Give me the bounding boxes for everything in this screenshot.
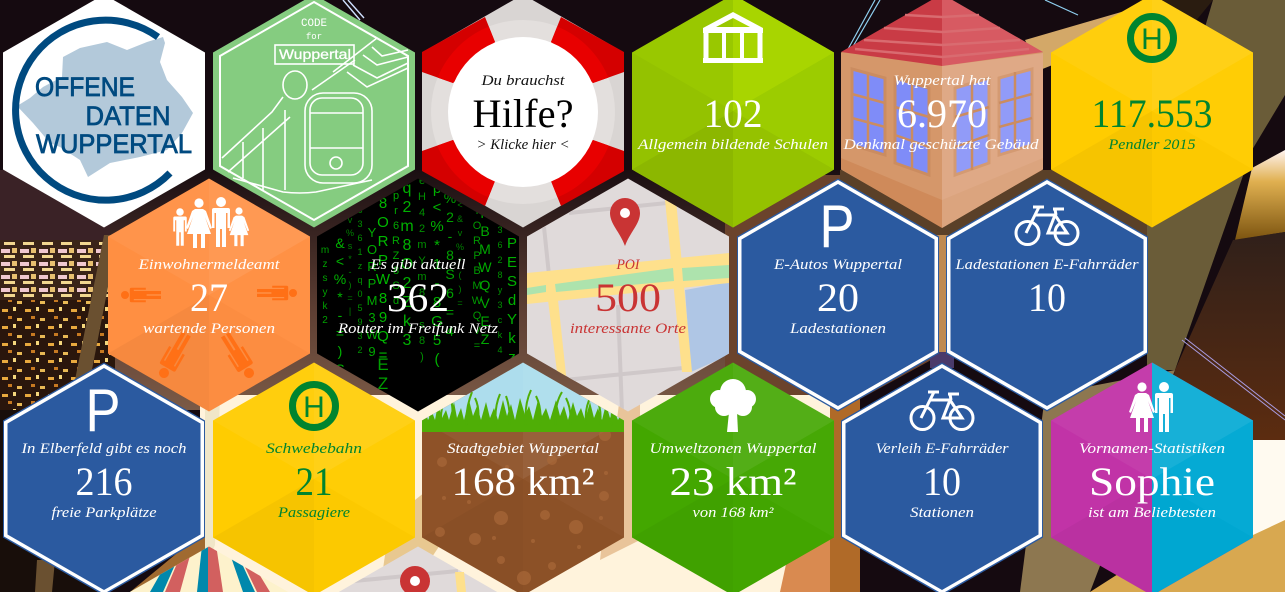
- map road: [455, 572, 466, 592]
- text: 500: 500: [595, 275, 661, 320]
- hexagon: e-bike rental: [841, 362, 1043, 592]
- text: 21: 21: [296, 459, 332, 504]
- matrix rain: &<%*-=)S(=: [332, 235, 348, 415]
- text: 216: 216: [76, 459, 132, 504]
- matrix rain: v%s*-)=|: [345, 215, 355, 319]
- logo: wordmark: OFFENE: [35, 72, 135, 102]
- illustration: city map: [527, 200, 729, 412]
- logo: map of Wuppertal: [17, 37, 193, 177]
- hexagon: residents office: [108, 178, 310, 412]
- text: Verleih E-Fahrräder: Verleih E-Fahrräder: [876, 441, 1009, 457]
- tent stripes: [150, 546, 270, 592]
- text: 27: 27: [190, 275, 228, 320]
- matrix rain: p<%*1-8G5(: [428, 180, 446, 370]
- sky: [422, 362, 624, 420]
- text: Stationen: Stationen: [910, 505, 974, 521]
- hexagon: map, partly cut off: [339, 546, 497, 592]
- icon: stop sign: H: [303, 391, 325, 424]
- matrix rain: q2m8O2Zk3: [398, 180, 416, 351]
- icon: tree: [710, 379, 756, 432]
- text: 23 km²: 23 km²: [670, 459, 797, 504]
- hexagon: Schwebebahn: [213, 362, 415, 592]
- text: Es gibt aktuell: Es gibt aktuell: [369, 257, 466, 273]
- hexagon: e-car charging: [737, 178, 939, 412]
- icon: bicycle: [1016, 207, 1078, 244]
- hexagon: points of interest: [527, 178, 729, 412]
- badge: Wuppertal label: [275, 45, 354, 64]
- icon: bus stop sign: [1130, 16, 1174, 60]
- hexagon: first names: [1051, 362, 1253, 592]
- text: 6.970: 6.970: [897, 91, 987, 136]
- text: Stadtgebiet Wuppertal: Stadtgebiet Wuppertal: [447, 441, 599, 457]
- text: Hilfe?: Hilfe?: [473, 91, 573, 136]
- text: Du brauchst: Du brauchst: [480, 73, 566, 89]
- text: 20: 20: [817, 275, 859, 320]
- matrix rain: PESdYkz: [504, 235, 520, 368]
- text: 102: 102: [704, 91, 762, 136]
- hexagon: schools: [632, 0, 834, 228]
- text: POI: POI: [616, 257, 641, 273]
- logo: wordmark: DATEN: [86, 101, 170, 131]
- matrix rain: YORPM3W9: [364, 225, 380, 361]
- text: Allgemein bildende Schulen: Allgemein bildende Schulen: [637, 137, 828, 153]
- hexagon: circus tent, partly cut off: [130, 546, 288, 592]
- text: Denkmal geschützte Gebäud: Denkmal geschützte Gebäud: [842, 137, 1039, 153]
- text: ist am Beliebtesten: ist am Beliebtesten: [1088, 505, 1216, 521]
- text: Vornamen-Statistiken: Vornamen-Statistiken: [1079, 441, 1225, 457]
- icon: family: [173, 197, 249, 248]
- text: freie Parkplätze: freie Parkplätze: [52, 505, 157, 521]
- text: E-Autos Wuppertal: E-Autos Wuppertal: [773, 257, 902, 273]
- text: interessante Orte: interessante Orte: [570, 321, 687, 337]
- matrix rain: [322, 180, 517, 389]
- icon: map pin: [400, 566, 430, 592]
- icon: bicycle: [911, 392, 973, 430]
- matrix rain: 8ORPW89Q=: [374, 195, 392, 366]
- text: Sophie: Sophie: [1089, 459, 1215, 504]
- icon: stop sign: [292, 384, 336, 428]
- matrix rain: PBMWQVEZ: [477, 205, 493, 349]
- text: Ladestationen: Ladestationen: [789, 321, 886, 337]
- text: Pendler 2015: Pendler 2015: [1107, 137, 1196, 153]
- text: 10: 10: [923, 459, 961, 504]
- hexagon: listed buildings: [841, 0, 1043, 228]
- text: for: for: [306, 32, 322, 42]
- matrix rain: <&v%*()=: [455, 200, 465, 312]
- text: Klicke hier: > Klicke hier <: [477, 137, 569, 153]
- icon: parking P: P: [86, 377, 120, 444]
- logo: wordmark: WUPPERTAL: [36, 129, 192, 159]
- icon: couple: [1129, 382, 1173, 432]
- icon: waiting people: [121, 286, 297, 382]
- icon: school building: [703, 12, 763, 63]
- hexagon: Offene Daten Wuppertal logo: [3, 0, 205, 228]
- text: Wuppertal hat: Wuppertal hat: [894, 73, 992, 89]
- text: 362: 362: [387, 275, 449, 320]
- icon: suspension railway line art: [222, 38, 408, 193]
- text: 168 km²: 168 km²: [452, 459, 595, 504]
- icon: lifebuoy: [422, 17, 624, 206]
- logo: ring: [16, 20, 170, 200]
- matrix rain: mzsyk2: [320, 245, 330, 329]
- hexagon: commuters: [1051, 0, 1253, 228]
- hexagon: Code for Wuppertal: [213, 0, 415, 228]
- hexagon: Elberfeld parking: [3, 362, 205, 592]
- hexagon: environmental zones: [632, 362, 834, 592]
- text: wartende Personen: wartende Personen: [143, 321, 275, 337]
- soil pebbles: [435, 429, 611, 585]
- matrix rain: 3628y3ck4: [495, 225, 505, 360]
- map street: [354, 571, 458, 581]
- matrix rain: EZ: [374, 355, 392, 393]
- hexagon: lifebuoy help: [422, 0, 624, 228]
- text: Umweltzonen Wuppertal: Umweltzonen Wuppertal: [650, 441, 816, 457]
- matrix rain: 8361zq05932: [355, 205, 365, 359]
- text: Schwebebahn: Schwebebahn: [266, 441, 362, 457]
- text: Einwohnermeldeamt: Einwohnermeldeamt: [137, 257, 281, 273]
- illustration: house: [841, 0, 1043, 228]
- text: Wuppertal: Wuppertal: [279, 46, 351, 62]
- hexagon: Freifunk matrix: [317, 175, 520, 415]
- icon: bus stop sign: H: [1141, 23, 1163, 56]
- matrix rain: eH42mYm8-s8): [416, 175, 428, 367]
- matrix rain: YORPBMWQV=: [471, 205, 483, 355]
- text: 10: 10: [1028, 275, 1066, 320]
- grass: [422, 390, 624, 432]
- text: von 168 km²: von 168 km²: [692, 505, 774, 521]
- text: 117.553: 117.553: [1092, 91, 1212, 136]
- hexagon: city area: [422, 362, 624, 592]
- matrix rain: %2-8S6=4: [442, 190, 458, 342]
- hexagon: e-bike charging: [946, 178, 1148, 412]
- logo: wordmark: [35, 72, 192, 159]
- text: In Elberfeld gibt es noch: In Elberfeld gibt es noch: [20, 441, 186, 457]
- text: Router im Freifunk Netz: Router im Freifunk Netz: [337, 321, 498, 337]
- text: Passagiere: Passagiere: [277, 505, 351, 521]
- icon: parking P: P: [820, 193, 854, 260]
- text: code for: CODE: [301, 18, 327, 30]
- matrix rain: pr6RZ8Sd: [390, 190, 402, 310]
- text: Ladestationen E-Fahrräder: Ladestationen E-Fahrräder: [954, 257, 1139, 273]
- icon: map pin: [610, 198, 640, 246]
